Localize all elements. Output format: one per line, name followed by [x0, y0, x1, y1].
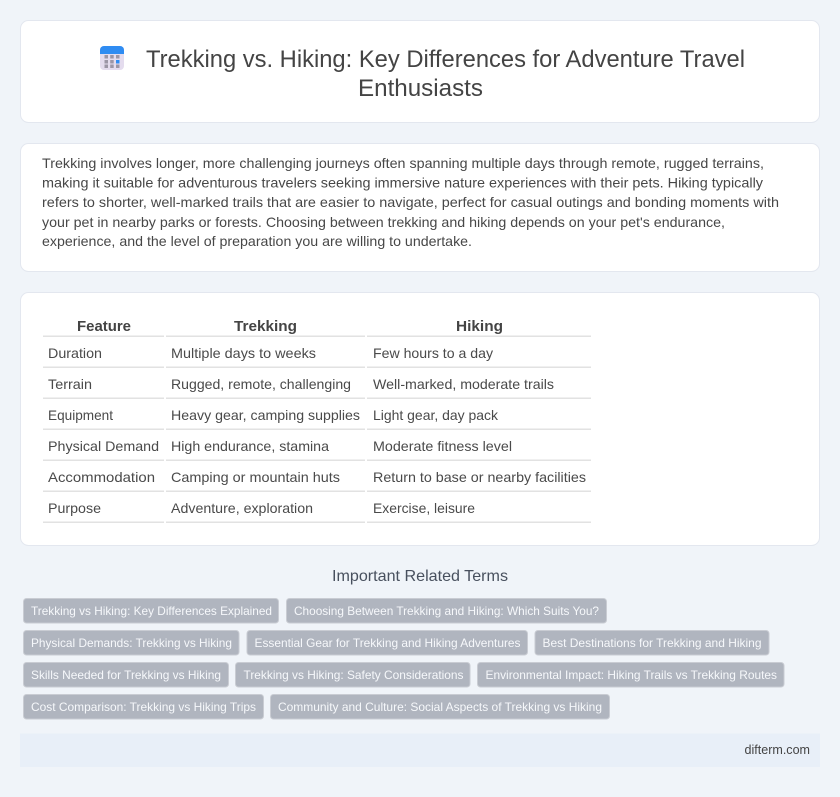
tag: Choosing Between Trekking and Hiking: Which Suits You? [294, 604, 599, 618]
tag [24, 694, 264, 719]
text block: introduction: making it suitable for adventurous travelers seeking immersive nature experiences with their pets. Hiking typically [42, 174, 763, 190]
table header row: Hiking [456, 318, 503, 335]
row: purpose: Exercise, leisure [373, 500, 475, 516]
row: purpose: Purpose [48, 500, 101, 516]
tag [270, 694, 610, 719]
table header row: Trekking [234, 318, 297, 335]
row: accommodation [48, 469, 586, 485]
row: equipment: Light gear, day pack [373, 407, 499, 423]
row: accommodation: Return to base or nearby facilities [373, 469, 586, 485]
row: purpose [48, 500, 475, 516]
text block: introduction: experience, and the level of preparation you are willing to undertake. [42, 233, 472, 249]
panel: intro text [20, 144, 820, 272]
row: physical demand: Physical Demand [48, 438, 159, 454]
row: physical demand: Moderate fitness level [373, 438, 512, 454]
row: equipment: Equipment [48, 407, 113, 423]
heading: important related terms: Important Related Terms [332, 568, 508, 585]
tag: Skills Needed for Trekking vs Hiking [31, 668, 221, 682]
panel: header [20, 20, 820, 122]
tag: Best Destinations for Trekking and Hiking [542, 636, 762, 650]
text block: introduction: refers to shorter, well-marked trails that are easier to navigate, perfect for casual outings and bonding moments with [42, 194, 779, 210]
table header row [77, 318, 503, 335]
footer: difterm.com [744, 742, 810, 757]
row: terrain [48, 376, 554, 392]
tag [24, 598, 278, 623]
row: physical demand [48, 438, 512, 454]
tag: Trekking vs Hiking: Safety Considerations [244, 668, 464, 682]
tag: Environmental Impact: Hiking Trails vs Trekking Routes [486, 668, 777, 682]
row: duration: Multiple days to weeks [171, 345, 316, 361]
panel: related term tags [24, 598, 784, 719]
row: purpose: Adventure, exploration [171, 500, 313, 516]
tag [24, 630, 239, 655]
title: Enthusiasts [358, 75, 483, 102]
text block: introduction: Trekking involves longer, more challenging journeys often spanning multiple days through remote, rugged terrains, [42, 155, 764, 171]
tag [478, 662, 784, 687]
text block: introduction [42, 155, 779, 249]
row: equipment [48, 407, 499, 423]
row: terrain: Rugged, remote, challenging [171, 376, 351, 392]
row: duration: Few hours to a day [373, 345, 493, 361]
icon: calendar [100, 46, 124, 70]
row: equipment: Heavy gear, camping supplies [171, 407, 360, 423]
row: duration [48, 345, 493, 361]
title: Trekking vs. Hiking: Key Differences for Adventure Travel [146, 46, 745, 73]
row: accommodation: Camping or mountain huts [171, 469, 340, 485]
panel: comparison table [20, 292, 820, 546]
tag: Essential Gear for Trekking and Hiking Adventures [254, 636, 520, 650]
footer [20, 734, 820, 767]
table header row: Feature [77, 318, 131, 335]
row: terrain: Terrain [48, 376, 92, 392]
row: accommodation: Accommodation [48, 469, 155, 485]
tag: Cost Comparison: Trekking vs Hiking Trips [31, 700, 256, 714]
title [146, 46, 745, 102]
row: duration: Duration [48, 345, 102, 361]
row: terrain: Well-marked, moderate trails [373, 376, 554, 392]
tag [247, 630, 528, 655]
tag [286, 598, 606, 623]
tag: Physical Demands: Trekking vs Hiking [31, 636, 232, 650]
tag [236, 662, 470, 687]
text block: introduction: your pet in nearby parks or forests. Choosing between trekking and hiking depends on your pet's endurance, [42, 214, 725, 230]
row: physical demand: High endurance, stamina [171, 438, 329, 454]
tag: Trekking vs Hiking: Key Differences Explained [31, 604, 272, 618]
tag [535, 630, 769, 655]
tag [24, 662, 228, 687]
tag: Community and Culture: Social Aspects of Trekking vs Hiking [278, 700, 602, 714]
